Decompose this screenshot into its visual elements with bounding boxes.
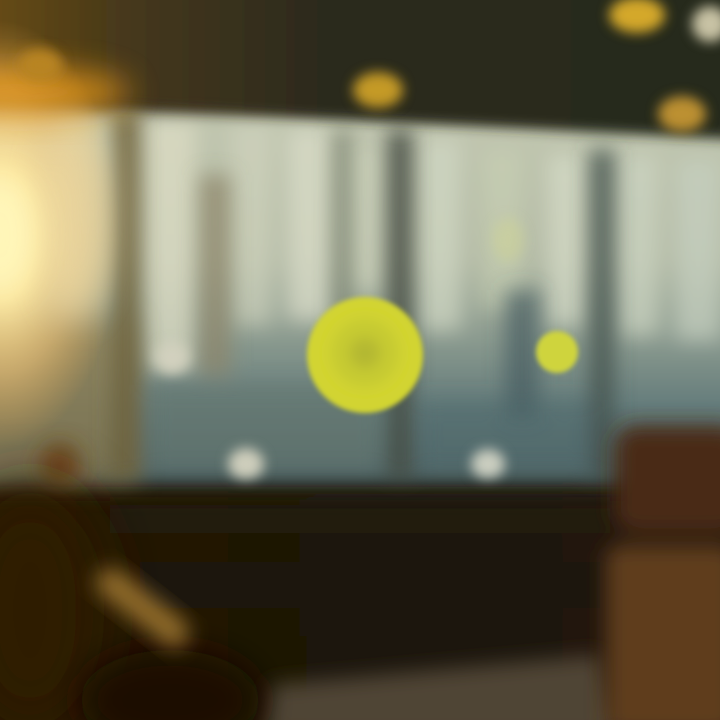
dark sofa and floor	[0, 494, 720, 720]
floor highlight	[262, 655, 620, 720]
ceiling	[0, 0, 720, 140]
right brown boxes	[606, 425, 720, 720]
warm tint lower-left of window	[0, 320, 130, 490]
left brown chair	[0, 443, 260, 720]
sun glare	[0, 20, 130, 450]
small white lights	[156, 218, 524, 480]
ceiling lights	[18, 0, 720, 132]
tan cushion streak	[90, 562, 195, 653]
window band	[0, 108, 720, 486]
small yellow circle	[536, 331, 578, 373]
window columns	[112, 110, 614, 480]
large yellow circle	[307, 297, 423, 413]
